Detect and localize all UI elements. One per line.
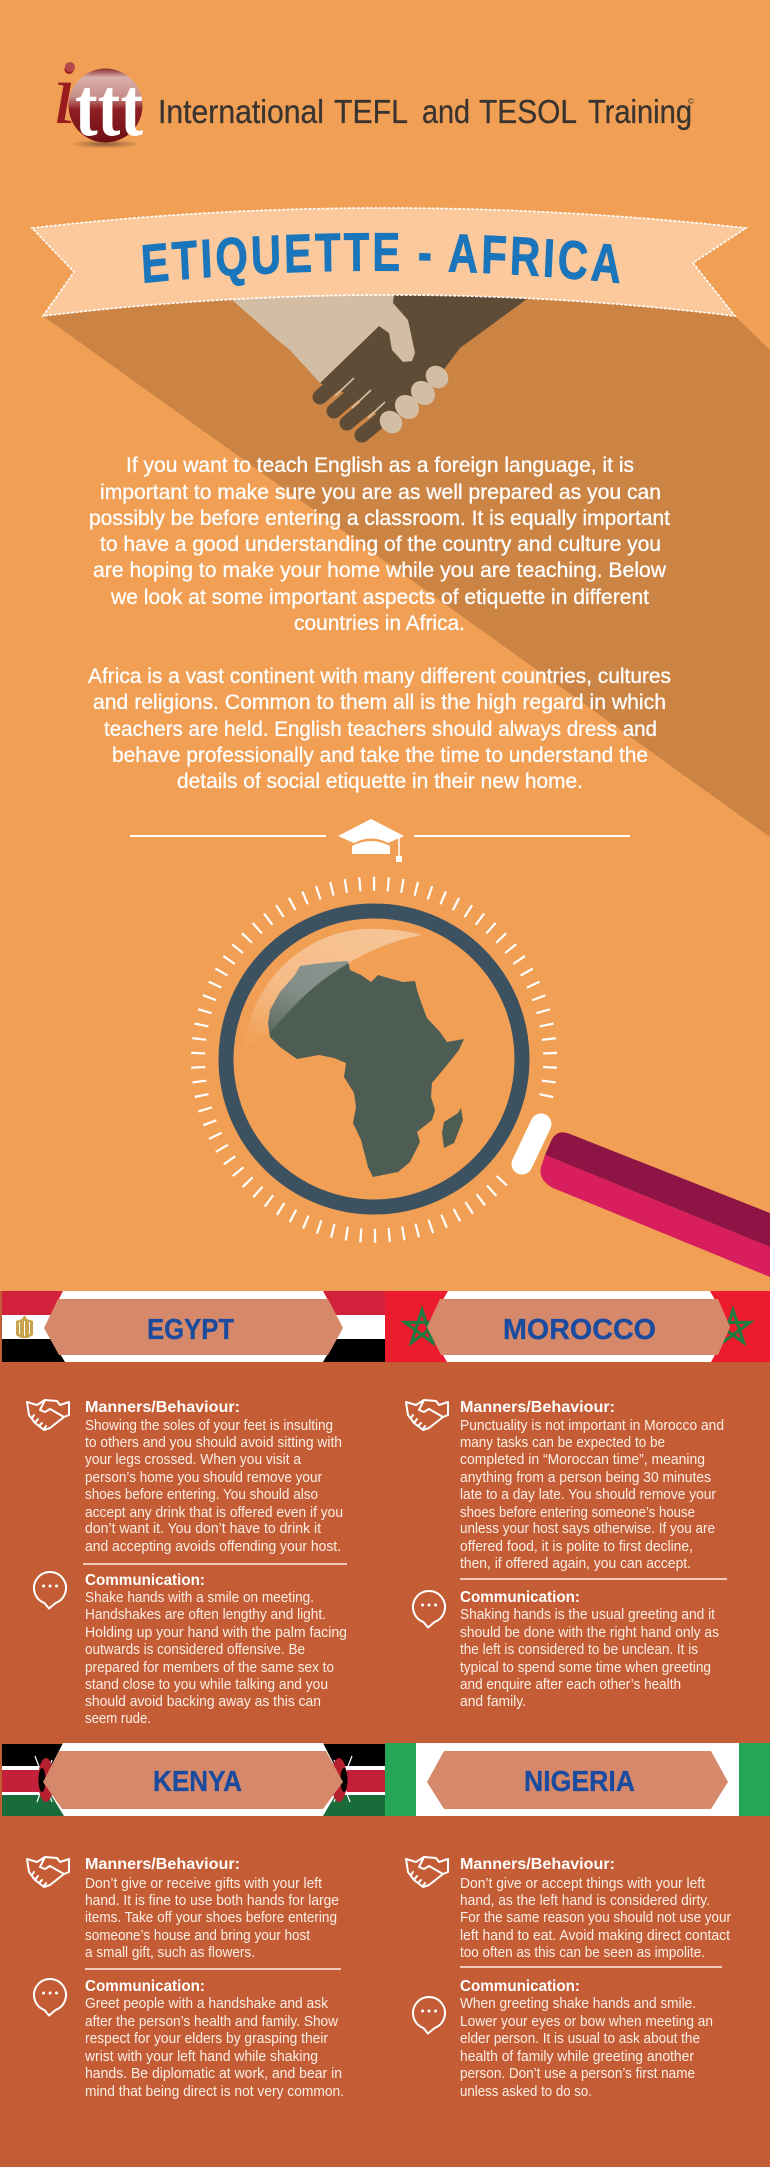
icon: speech bubble xyxy=(34,1979,66,2016)
icon: handshake xyxy=(27,1857,69,1887)
text: manners: person’s home you should remove your xyxy=(85,1470,322,1486)
icon: speech bubble xyxy=(413,1591,445,1628)
text: communication: When greeting shake hands and smile. xyxy=(460,1996,696,2012)
intro text block: details of social etiquette in their new home. xyxy=(177,770,583,793)
text: communication: Holding up your hand with the palm facing xyxy=(85,1625,347,1641)
intro text block: are hoping to make your home while you are teaching. Below xyxy=(93,559,667,582)
icon: stars xyxy=(405,1310,750,1343)
text: manners: Manners/Behaviour: xyxy=(85,1856,240,1873)
text: manners: late to a day late. You should remove your xyxy=(460,1487,716,1503)
text: manners: anything from a person being 30 minutes xyxy=(460,1470,711,1486)
text: communication xyxy=(85,1572,347,1727)
text: communication: Communication: xyxy=(85,1572,205,1589)
text: communication: respect for your elders by grasping their xyxy=(85,2031,328,2047)
icon: speech bubble xyxy=(34,1572,66,1608)
Nigeria flag banner xyxy=(385,1743,770,1816)
long shadow behind banner xyxy=(43,280,770,837)
text: manners: shoes before entering someone’s house xyxy=(460,1505,695,1521)
text: manners: to others and you should avoid sitting with xyxy=(85,1435,342,1451)
logo: i xyxy=(52,46,76,143)
text: communication: unless asked to do so. xyxy=(460,2084,592,2100)
text: manners: accept any drink that is offered even if you xyxy=(85,1505,343,1521)
logo: ttt xyxy=(75,61,143,154)
logo wordmark: International xyxy=(158,93,324,130)
text: manners: offered food, it is polite to first decline, xyxy=(460,1539,693,1555)
intro text block xyxy=(88,454,671,793)
logo wordmark: Training xyxy=(588,93,692,130)
country name: MOROCCO xyxy=(503,1314,656,1346)
text: manners: Don’t give or receive gifts with your left xyxy=(85,1876,322,1892)
text: communication: and family. xyxy=(460,1694,526,1710)
intro text block: important to make sure you are as well prepared as you can xyxy=(100,481,661,504)
text: manners: hand, as the left hand is considered dirty. xyxy=(460,1893,710,1909)
text: communication: after the person’s health and family. Show xyxy=(85,2014,338,2030)
text: communication: health of family while greeting another xyxy=(460,2049,694,2065)
text: manners: then, if offered again, you can accept. xyxy=(460,1556,691,1572)
title: ETIQUETTE - AFRICA xyxy=(142,232,620,286)
text: communication xyxy=(84,1978,344,2100)
intro text block: possibly be before entering a classroom. It is equally important xyxy=(89,507,670,530)
text: manners: a small gift, such as flowers. xyxy=(85,1945,255,1961)
text: communication: Communication: xyxy=(460,1978,580,1995)
divider with graduation cap icon xyxy=(130,819,630,862)
text: manners: items. Take off your shoes before entering xyxy=(85,1910,337,1926)
intro text block: If you want to teach English as a foreign language, it is xyxy=(126,454,634,477)
text: communication: Shaking hands is the usual greeting and it xyxy=(460,1607,715,1623)
logo wordmark: TESOL xyxy=(479,93,577,130)
country name: EGYPT xyxy=(147,1314,234,1346)
text: communication: Communication: xyxy=(85,1978,205,1995)
text: communication: wrist with your left hand while shaking xyxy=(84,2049,318,2065)
logo wordmark xyxy=(158,93,694,130)
text: manners: completed in “Moroccan time”, meaning xyxy=(460,1452,705,1468)
lens ring xyxy=(226,911,522,1207)
text: manners: don’t want it. You don’t have to drink it xyxy=(85,1521,321,1537)
tick ring xyxy=(198,884,550,1236)
text: communication: hands. Be diplomatic at work, and bear in xyxy=(85,2066,342,2082)
text: manners: Don’t give or accept things with your left xyxy=(460,1876,705,1892)
text: manners: left hand to eat. Avoid making direct contact xyxy=(460,1928,730,1944)
text: communication: prepared for members of the same sex to xyxy=(85,1660,334,1676)
text: communication: and enquire after each other’s health xyxy=(460,1677,681,1693)
intro text block: to have a good understanding of the country and culture you xyxy=(100,533,661,556)
text: communication xyxy=(460,1589,719,1710)
icon: shields xyxy=(35,1756,352,1802)
text: manners: Manners/Behaviour: xyxy=(460,1856,615,1873)
text: manners: and accepting avoids offending your host. xyxy=(85,1539,341,1555)
logo xyxy=(52,46,143,154)
text: communication: Lower your eyes or bow when meeting an xyxy=(460,2014,713,2030)
text: manners xyxy=(460,1856,731,1961)
lens collar xyxy=(522,1124,541,1164)
text: communication: should be done with the right hand only as xyxy=(460,1625,719,1641)
icon: handshake xyxy=(27,1400,69,1430)
text: communication: seem rude. xyxy=(85,1711,151,1727)
panel: Kenya xyxy=(2,1743,385,2100)
text: communication: mind that being direct is not very common. xyxy=(85,2084,344,2100)
logo wordmark: and xyxy=(422,93,470,130)
text: communication: stand close to you while talking and you xyxy=(85,1677,328,1693)
Kenya flag banner xyxy=(2,1743,385,1816)
text: communication: Shake hands with a smile on meeting. xyxy=(85,1590,314,1606)
text: manners: many tasks can be expected to be xyxy=(460,1435,665,1451)
Egypt flag banner xyxy=(2,1291,385,1362)
intro text block: teachers are held. English teachers should always dress and xyxy=(104,718,657,741)
intro text block: we look at some important aspects of etiquette in different xyxy=(110,586,649,609)
icon: Africa silhouette xyxy=(268,961,464,1177)
icon: handshake xyxy=(406,1400,448,1430)
icon: handshake xyxy=(406,1857,448,1887)
title ribbon banner xyxy=(30,207,748,317)
text: manners xyxy=(85,1399,343,1555)
text: manners: For the same reason you should not use your xyxy=(460,1910,731,1926)
text: communication: Communication: xyxy=(460,1589,580,1606)
icon: speech bubble xyxy=(413,1997,445,2034)
text: manners: hand. It is fine to use both hands for large xyxy=(85,1893,339,1909)
text: communication: Handshakes are often lengthy and light. xyxy=(85,1607,326,1623)
text: manners: Punctuality is not important in Morocco and xyxy=(460,1418,724,1434)
text: communication: person. Don’t use a person’s first name xyxy=(460,2066,695,2082)
text: manners: Manners/Behaviour: xyxy=(460,1399,615,1416)
logo wordmark: © xyxy=(688,97,694,106)
intro text block: behave professionally and take the time to understand the xyxy=(112,744,648,767)
text: manners: too often as this can be seen as impolite. xyxy=(460,1945,705,1961)
magnifying glass with Africa map xyxy=(198,884,770,1277)
text: communication: should avoid backing away as this can xyxy=(85,1694,321,1710)
country name: NIGERIA xyxy=(524,1766,635,1798)
text: communication: the left is considered to be unclean. It is xyxy=(460,1642,698,1658)
text: manners xyxy=(460,1399,724,1572)
text: communication: typical to spend some time when greeting xyxy=(460,1660,711,1676)
text: communication: Greet people with a handshake and ask xyxy=(85,1996,329,2012)
icon: eagle emblem xyxy=(16,1315,33,1338)
intro text block: countries in Africa. xyxy=(294,612,465,635)
intro text block: and religions. Common to them all is the high regard in which xyxy=(93,691,666,714)
logo wordmark: TEFL xyxy=(334,93,408,130)
text: communication xyxy=(460,1978,713,2100)
panel: Morocco xyxy=(385,1291,770,1710)
panel: Nigeria xyxy=(385,1743,770,2100)
icon: handshake illustration xyxy=(215,285,540,438)
text: manners: Showing the soles of your feet is insulting xyxy=(85,1418,333,1434)
text: manners: your legs crossed. When you visit a xyxy=(85,1452,302,1468)
text: manners xyxy=(85,1856,339,1961)
handle xyxy=(545,1132,770,1247)
background: lower rust area xyxy=(0,1291,770,2167)
text: manners: unless your host says otherwise. If you are xyxy=(460,1521,715,1537)
text: communication: elder person. It is usual to ask about the xyxy=(460,2031,700,2047)
background: upper orange area xyxy=(0,0,770,1291)
lens glare xyxy=(245,929,422,1047)
country name: KENYA xyxy=(153,1766,242,1798)
text: manners: shoes before entering. You should also xyxy=(85,1487,318,1503)
Morocco flag banner xyxy=(385,1291,770,1362)
text: manners: someone’s house and bring your host xyxy=(85,1928,310,1944)
intro text block: Africa is a vast continent with many different countries, cultures xyxy=(88,665,671,688)
panel: Egypt xyxy=(2,1291,385,1727)
text: manners: Manners/Behaviour: xyxy=(85,1399,240,1416)
text: communication: outwards is considered offensive. Be xyxy=(85,1642,305,1658)
